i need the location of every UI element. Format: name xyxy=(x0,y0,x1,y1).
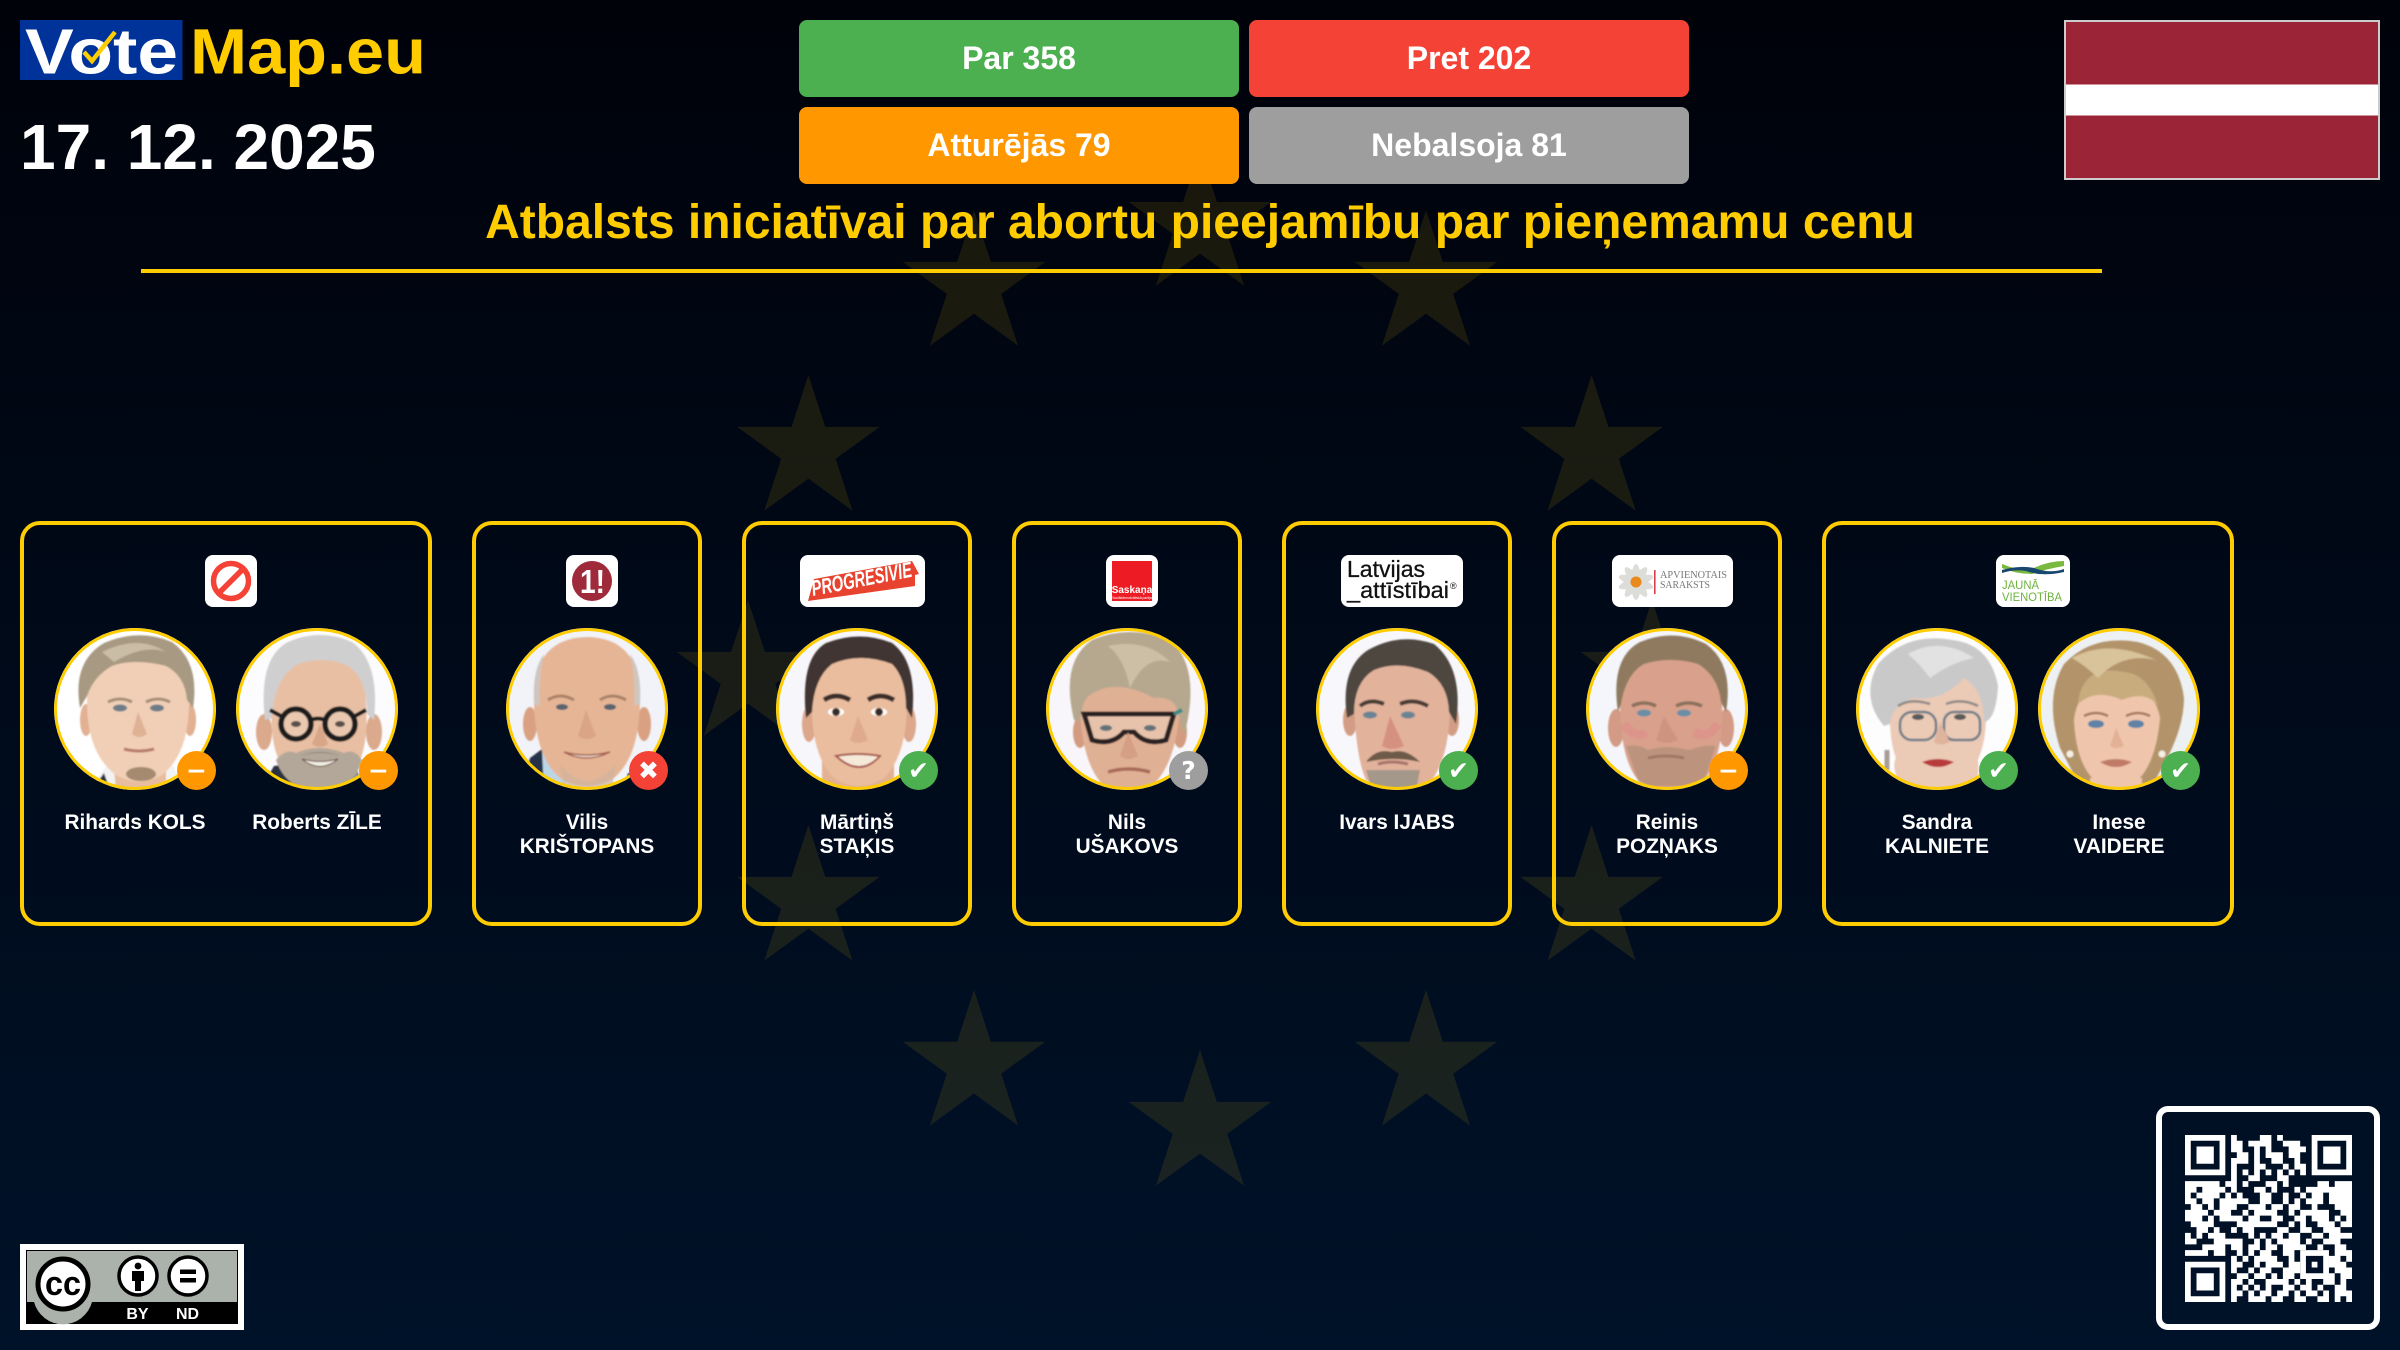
vote badge: for xyxy=(1439,751,1478,790)
name: Ivars IJABS xyxy=(1339,811,1455,834)
name: Roberts ZĪLE xyxy=(252,811,382,834)
vote badge: against xyxy=(629,751,668,790)
vote badge: for: ✔ xyxy=(2170,756,2191,785)
name: Mārtiņš xyxy=(820,811,894,834)
vote badge: abstain xyxy=(359,751,398,790)
party logo: Latvijas attīstībai: ® xyxy=(1450,581,1457,591)
vote badge: did not vote: ? xyxy=(1181,756,1196,785)
photo: Mārtiņš Staķis xyxy=(776,628,938,790)
vote count: Atturējās: Atturējās 79 xyxy=(927,127,1111,163)
date: 17. 12. 2025 xyxy=(20,111,376,183)
party logo: Apvienotais saraksts xyxy=(1612,555,1732,607)
vote count: Par xyxy=(799,20,1239,97)
name: Reinis xyxy=(1636,811,1698,834)
vote badge: against: ✖ xyxy=(638,756,659,785)
panel: Nacionālā apvienība group xyxy=(20,521,432,926)
photo: Rihards Kols xyxy=(54,628,216,790)
name: Vilis xyxy=(566,811,608,834)
party logo: Latvijas attīstībai xyxy=(1341,555,1463,607)
name xyxy=(520,811,654,858)
vote badge: did not vote xyxy=(1169,751,1208,790)
QR code xyxy=(2156,1106,2380,1330)
vote badge: abstain: − xyxy=(1718,756,1739,785)
name: UŠAKOVS xyxy=(1076,835,1178,858)
vote badge: for: ✔ xyxy=(1988,756,2009,785)
party logo: Saskaņa xyxy=(1106,555,1158,607)
vote badge: abstain xyxy=(177,751,216,790)
licence badge: CC BY-ND: cc xyxy=(45,1265,81,1303)
photo: Ivars Ijabs xyxy=(1316,628,1478,790)
name: Sandra xyxy=(1902,811,1972,834)
vote count: Pret xyxy=(1249,20,1689,97)
photo: Inese Vaidere xyxy=(2038,628,2200,790)
party logo: Apvienotais saraksts: APVIENOTAIS xyxy=(1660,570,1726,581)
panel: Latvijas Pirmā vieta xyxy=(472,521,702,926)
party logo: Jaunā Vienotība: JAUNĀ xyxy=(2002,580,2039,592)
vote count: Par: Par 358 xyxy=(962,40,1076,76)
vote count: Nebalsoja: Nebalsoja 81 xyxy=(1371,127,1567,163)
name xyxy=(820,811,894,858)
name: KRIŠTOPANS xyxy=(520,835,654,858)
name xyxy=(1616,811,1718,858)
title: Atbalsts iniciatīvai par abortu pieejamību par pieņemamu cenu xyxy=(485,196,1915,249)
name: STAĶIS xyxy=(820,835,894,858)
name: Nils xyxy=(1108,811,1146,834)
vote badge: abstain: − xyxy=(368,756,389,785)
licence badge: CC BY-ND xyxy=(20,1244,244,1330)
photo: Reinis Pozņaks xyxy=(1586,628,1748,790)
photo: Vilis Krištopans xyxy=(506,628,668,790)
vote badge: for: ✔ xyxy=(1448,756,1469,785)
vote badge: for xyxy=(2161,751,2200,790)
vote count: Nebalsoja xyxy=(1249,107,1689,184)
party logo: Apvienotais saraksts: SARAKSTS xyxy=(1660,580,1710,591)
name: VAIDERE xyxy=(2074,835,2164,858)
name xyxy=(1076,811,1178,858)
panel: Latvijas attīstībai xyxy=(1282,521,1512,926)
party logo: 1! xyxy=(566,555,618,607)
photo: Sandra Kalniete xyxy=(1856,628,2018,790)
name: KALNIETE xyxy=(1885,835,1989,858)
party logo: prohibition sign xyxy=(205,555,257,607)
name: Rihards KOLS xyxy=(64,811,205,834)
name: Inese xyxy=(2092,811,2146,834)
panel: Progresīvie xyxy=(742,521,972,926)
name xyxy=(1885,811,1989,858)
logo: VoteMap.eu xyxy=(20,20,426,88)
name: POZŅAKS xyxy=(1616,835,1718,858)
vote badge: for xyxy=(899,751,938,790)
vote count: Atturējās xyxy=(799,107,1239,184)
vote badge: abstain xyxy=(1709,751,1748,790)
party logo: Saskaņa: Saskaņa xyxy=(1112,585,1153,596)
panel: Saskaņa xyxy=(1012,521,1242,926)
licence badge: CC BY-ND: BY xyxy=(126,1306,149,1323)
flag: Latvia xyxy=(2064,20,2380,180)
party logo: Saskaņa: Sociāldemokrātiskā partija xyxy=(1112,596,1152,600)
licence badge: CC BY-ND: ND xyxy=(176,1306,199,1323)
panel: Apvienotais saraksts xyxy=(1552,521,1782,926)
party logo: 1!: 1! xyxy=(580,563,605,600)
name xyxy=(2074,811,2164,858)
vote badge: abstain: − xyxy=(186,756,207,785)
party logo: Jaunā Vienotība xyxy=(1996,555,2070,607)
party logo: Latvijas attīstībai: _attīstībai xyxy=(1346,577,1449,603)
panel: Jaunā Vienotība xyxy=(1822,521,2234,926)
vote count: Pret: Pret 202 xyxy=(1407,40,1531,76)
title underline xyxy=(141,269,2102,273)
vote badge: for: ✔ xyxy=(908,756,929,785)
vote badge: for xyxy=(1979,751,2018,790)
party logo: Latvijas attīstībai: Latvijas xyxy=(1347,556,1425,582)
photo: Nils Ušakovs xyxy=(1046,628,1208,790)
party logo: Jaunā Vienotība: VIENOTĪBA xyxy=(2002,592,2062,604)
photo: Roberts Zīle xyxy=(236,628,398,790)
